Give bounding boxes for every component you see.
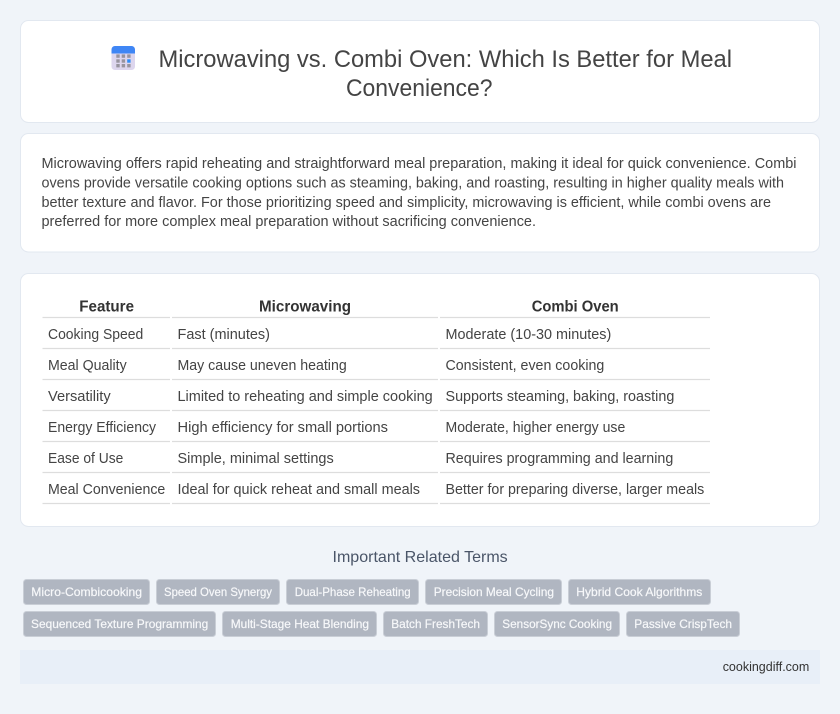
tag: Batch FreshTech: Batch FreshTech bbox=[391, 617, 480, 631]
table row: meal quality: Consistent, even cooking bbox=[446, 358, 604, 374]
tag: Passive CrispTech: Passive CrispTech bbox=[634, 617, 732, 631]
table header row bbox=[42, 298, 710, 318]
table row: energy efficiency bbox=[42, 420, 710, 442]
panel: comparison table bbox=[20, 274, 820, 526]
title: Microwaving vs. Combi Oven: Which Is Better for Meal bbox=[158, 46, 732, 73]
table row: cooking speed bbox=[42, 327, 710, 348]
table row: ease of use: Requires programming and learning bbox=[446, 451, 673, 467]
heading: important related terms: Important Related Terms bbox=[332, 549, 508, 566]
table row: ease of use bbox=[42, 451, 710, 472]
table row: meal quality bbox=[42, 358, 710, 380]
panel: related terms bbox=[24, 549, 740, 636]
tag: Hybrid Cook Algorithms: Hybrid Cook Algorithms bbox=[576, 585, 702, 599]
text block: summary: better texture and flavor. For those prioritizing speed and simplicity, microwaving is efficient, while combi ovens are bbox=[42, 194, 771, 211]
footer: cookingdiff.com bbox=[723, 659, 809, 674]
table row: meal convenience: Ideal for quick reheat and small meals bbox=[178, 482, 420, 498]
tag: Batch FreshTech bbox=[384, 612, 488, 636]
table header row: Feature bbox=[79, 298, 134, 316]
tag: Dual-Phase Reheating bbox=[286, 580, 418, 604]
tag: Micro-Combicooking: Micro-Combicooking bbox=[31, 585, 142, 599]
tag: Sequenced Texture Programming bbox=[24, 612, 216, 636]
table row: meal convenience: Meal Convenience bbox=[48, 482, 165, 498]
footer bbox=[20, 650, 820, 684]
tag: Multi-Stage Heat Blending: Multi-Stage Heat Blending bbox=[231, 617, 369, 631]
table header row: Combi Oven bbox=[532, 298, 619, 316]
tag: Speed Oven Synergy: Speed Oven Synergy bbox=[164, 585, 272, 599]
table row: cooking speed: Moderate (10-30 minutes) bbox=[446, 327, 611, 343]
tag: SensorSync Cooking bbox=[494, 612, 620, 636]
panel: header bbox=[20, 20, 820, 122]
title: Convenience? bbox=[346, 75, 492, 102]
table row: versatility: Versatility bbox=[48, 389, 111, 405]
text block: summary bbox=[42, 155, 796, 230]
tag: Multi-Stage Heat Blending bbox=[222, 612, 376, 636]
table row: meal convenience bbox=[42, 482, 710, 504]
table row: versatility: Limited to reheating and simple cooking bbox=[178, 389, 433, 405]
tag: Micro-Combicooking bbox=[24, 580, 150, 604]
panel: introduction bbox=[20, 134, 820, 252]
tag: Hybrid Cook Algorithms bbox=[568, 580, 710, 604]
title bbox=[158, 46, 732, 102]
tag: Precision Meal Cycling bbox=[426, 580, 562, 604]
table row: meal convenience: Better for preparing diverse, larger meals bbox=[446, 482, 704, 498]
text block: summary: ovens provide versatile cooking options such as steaming, baking, and roasting, resulting in higher quality meals with bbox=[42, 174, 784, 192]
table row: cooking speed: Cooking Speed bbox=[48, 327, 143, 343]
text block: summary: preferred for more complex meal preparation without sacrificing convenience. bbox=[42, 213, 536, 230]
table row: versatility bbox=[42, 389, 710, 410]
tag: Speed Oven Synergy bbox=[156, 580, 280, 604]
table row: energy efficiency: Energy Efficiency bbox=[48, 420, 157, 436]
table row: versatility: Supports steaming, baking, roasting bbox=[446, 389, 674, 405]
table row: ease of use: Simple, minimal settings bbox=[178, 451, 334, 467]
tag: Dual-Phase Reheating: Dual-Phase Reheating bbox=[295, 585, 411, 599]
table row: energy efficiency: Moderate, higher energy use bbox=[446, 420, 625, 436]
text block: summary: Microwaving offers rapid reheating and straightforward meal preparation, making it ideal for quick convenience. Combi bbox=[42, 155, 796, 172]
table row: meal quality: May cause uneven heating bbox=[178, 358, 347, 374]
table header row: Microwaving bbox=[259, 298, 351, 316]
table row: cooking speed: Fast (minutes) bbox=[178, 327, 270, 343]
table row: ease of use: Ease of Use bbox=[48, 451, 123, 467]
tag: Precision Meal Cycling: Precision Meal Cycling bbox=[434, 585, 554, 599]
tag: Sequenced Texture Programming: Sequenced Texture Programming bbox=[31, 617, 208, 631]
tag: SensorSync Cooking: SensorSync Cooking bbox=[502, 617, 612, 631]
tag: Passive CrispTech bbox=[626, 612, 740, 636]
table row: energy efficiency: High efficiency for small portions bbox=[178, 420, 388, 436]
icon: calendar bbox=[112, 46, 135, 70]
table row: meal quality: Meal Quality bbox=[48, 358, 127, 374]
